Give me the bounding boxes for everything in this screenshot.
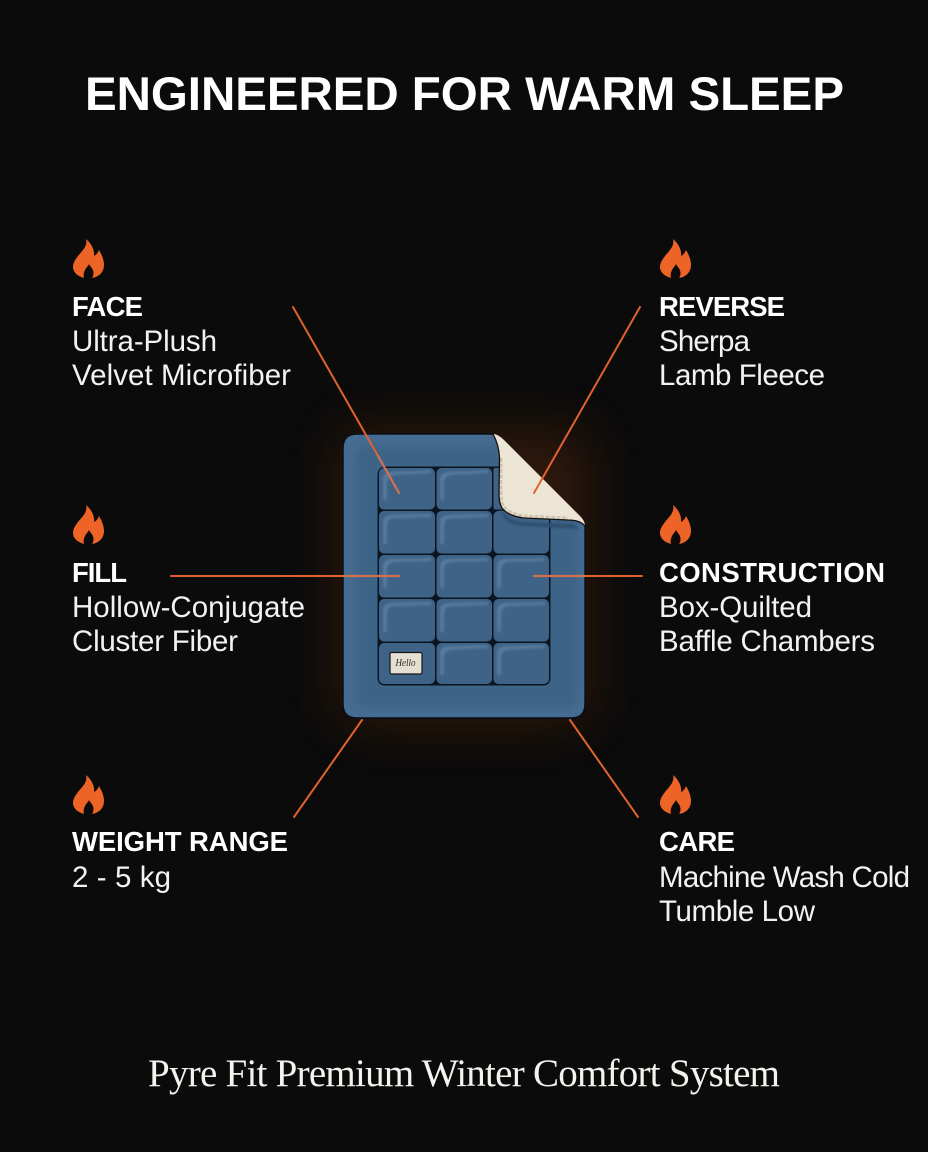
icon: flame bbox=[73, 505, 104, 544]
icon: flame bbox=[660, 505, 691, 544]
heading: FACE bbox=[72, 291, 143, 322]
text: Velvet Microfiber bbox=[72, 359, 291, 392]
text: Tumble Low bbox=[659, 895, 816, 928]
leader line: face bbox=[293, 307, 378, 456]
text: Ultra-Plush bbox=[72, 325, 217, 358]
title: ENGINEERED FOR WARM SLEEP bbox=[85, 68, 844, 121]
text: Box-Quilted bbox=[659, 591, 812, 624]
blanket illustration bbox=[343, 434, 585, 718]
leader line: fill bbox=[171, 575, 343, 577]
icon: flame bbox=[660, 775, 691, 814]
leader line: fill over blanket bbox=[343, 575, 399, 577]
panel: construction bbox=[659, 505, 885, 658]
quilted grid bbox=[378, 466, 550, 686]
sherpa fleece corner bbox=[493, 434, 585, 526]
icon: flame bbox=[73, 775, 104, 814]
panel: weight range bbox=[72, 775, 288, 894]
footer tagline: Pyre Fit Premium Winter Comfort System bbox=[148, 1052, 780, 1095]
text: Machine Wash Cold bbox=[659, 861, 910, 894]
sewn label: Hello bbox=[395, 658, 416, 669]
heading: REVERSE bbox=[659, 291, 785, 322]
leader line: care bbox=[570, 720, 638, 817]
blanket body bbox=[343, 434, 585, 718]
heading: CARE bbox=[659, 826, 735, 857]
leader line: face over blanket bbox=[378, 456, 399, 493]
icon: flame bbox=[660, 239, 691, 278]
blanket inner tone bbox=[355, 446, 579, 708]
heading: CONSTRUCTION bbox=[659, 557, 885, 588]
heading: FILL bbox=[72, 557, 127, 588]
leader line: reverse bbox=[534, 307, 640, 493]
text: Cluster Fiber bbox=[72, 625, 238, 658]
sewn label bbox=[390, 652, 422, 674]
text: Lamb Fleece bbox=[659, 359, 825, 392]
panel: face bbox=[72, 239, 291, 392]
leader line: construction bbox=[585, 575, 642, 577]
fleece inner edge bbox=[501, 458, 568, 518]
panel: reverse bbox=[659, 239, 825, 392]
text: Hollow-Conjugate bbox=[72, 591, 305, 624]
leader line: weight range bbox=[294, 720, 362, 817]
icon: flame bbox=[73, 239, 104, 278]
fold shadow bbox=[500, 505, 580, 529]
glow behind blanket bbox=[340, 432, 588, 722]
leader line: construction over blanket bbox=[534, 575, 585, 577]
panel: care bbox=[659, 775, 910, 928]
panel: fill bbox=[72, 505, 305, 658]
text: Baffle Chambers bbox=[659, 625, 875, 658]
heading: WEIGHT RANGE bbox=[72, 826, 288, 857]
text: Sherpa bbox=[659, 325, 751, 358]
text: 2 - 5 kg bbox=[72, 861, 171, 894]
fleece outline bbox=[493, 434, 585, 526]
